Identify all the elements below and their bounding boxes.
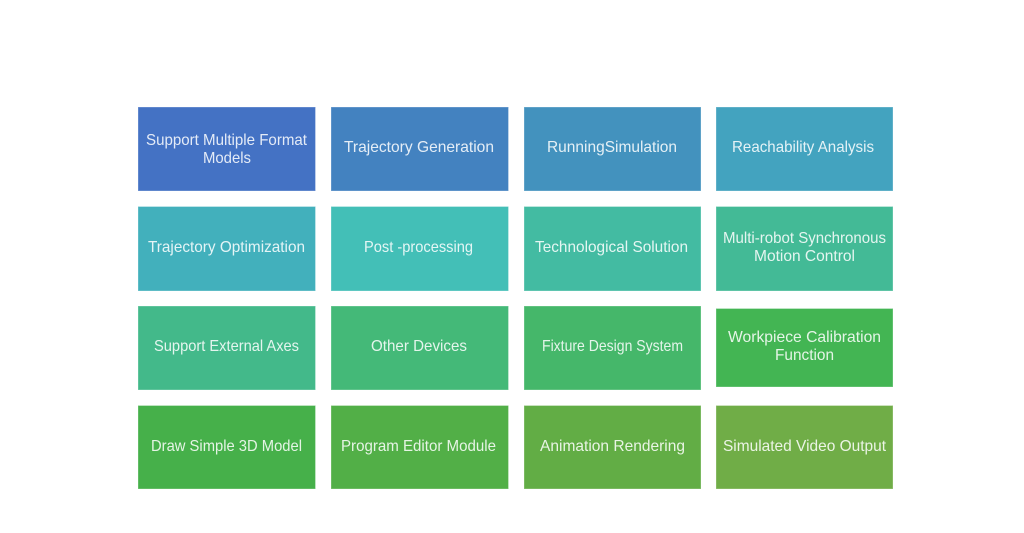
panel: Program Editor Module <box>331 406 508 489</box>
panel: Simulated Video Output: Simulated Video Output <box>723 438 887 455</box>
panel: Trajectory Optimization <box>138 206 316 291</box>
panel: Workpiece Calibration Function <box>716 308 893 387</box>
panel: Multi-robot Synchronous Motion Control <box>716 206 893 291</box>
panel: Draw Simple 3D Model: Draw Simple 3D Model <box>151 438 302 455</box>
panel: Reachability Analysis: Reachability Analysis <box>732 139 874 156</box>
panel: Support External Axes <box>138 306 316 390</box>
panel: Support Multiple Format Models: Support Multiple Format <box>146 132 308 149</box>
panel: Support Multiple Format Models <box>138 107 316 191</box>
panel: Post-processing <box>331 206 508 291</box>
panel: Program Editor Module: Program Editor Module <box>341 438 496 455</box>
panel: Other Devices: Other Devices <box>371 338 467 355</box>
panel: Fixture Design System <box>524 306 701 390</box>
panel: Fixture Design System: Fixture Design System <box>542 338 683 355</box>
panel: Trajectory Generation: Trajectory Generation <box>344 139 494 156</box>
panel: Multi-robot Synchronous Motion Control: Motion Control <box>754 248 855 265</box>
panel: Animation Rendering <box>524 406 701 489</box>
panel: Workpiece Calibration Function: Workpiece Calibration <box>728 329 881 346</box>
panel: Draw Simple 3D Model <box>138 406 316 489</box>
panel: Reachability Analysis <box>716 107 893 191</box>
panel: Other Devices <box>331 306 508 390</box>
panel: Animation Rendering: Animation Rendering <box>540 438 685 455</box>
panel: Workpiece Calibration Function: Function <box>775 347 834 364</box>
panel: Trajectory Generation <box>331 107 508 191</box>
panel: Support Multiple Format Models: Models <box>203 150 251 167</box>
panel: Running Simulation <box>524 107 701 191</box>
panel: Running Simulation: RunningSimulation <box>547 139 677 156</box>
panel: Simulated Video Output <box>716 406 893 489</box>
panel: Trajectory Optimization: Trajectory Optimization <box>148 239 305 256</box>
panel: Technological Solution: Technological Solution <box>535 239 688 256</box>
panel: Technological Solution <box>524 206 701 291</box>
panel: Post-processing: Post -processing <box>364 239 473 256</box>
panel: Multi-robot Synchronous Motion Control: Multi-robot Synchronous <box>723 230 886 247</box>
panel: Support External Axes: Support External Axes <box>154 338 299 355</box>
